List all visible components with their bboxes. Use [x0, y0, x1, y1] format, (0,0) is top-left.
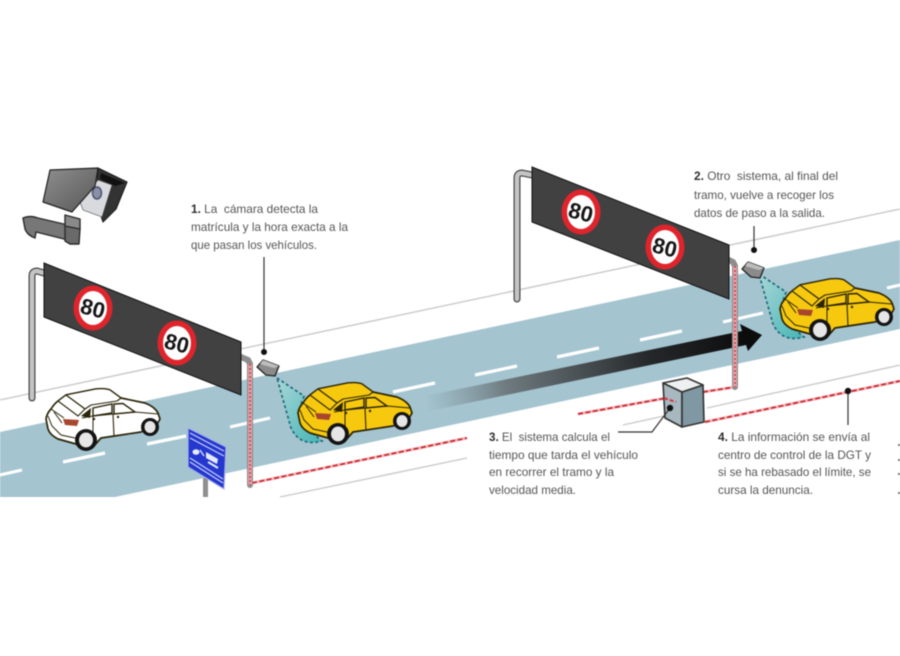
yellow car 2	[780, 279, 894, 341]
text: step 3: en recorrer el tramo y la	[489, 465, 614, 479]
text: step 2: 2. Otro sistema, al final del	[694, 169, 838, 183]
text: step 1: 1. La cámara detecta la	[191, 202, 318, 216]
camera bracket	[23, 215, 80, 244]
text: step 2: tramo, vuelve a recoger los	[694, 188, 834, 202]
road	[0, 240, 900, 497]
text: step 4: 4. La información se envía al	[718, 430, 870, 444]
arrow: vehicle travel along the section	[425, 324, 762, 412]
text: step 4	[718, 430, 871, 497]
leader line step 4	[845, 388, 851, 425]
second gantry left post	[517, 173, 532, 299]
text: step 1	[191, 202, 348, 252]
gantry sign 2 with speed limits	[532, 167, 729, 299]
left gantry post	[32, 271, 44, 398]
leader line step 1	[261, 257, 267, 355]
cropped marks at right edge	[898, 444, 900, 494]
speed limit 80 sign	[74, 286, 112, 330]
leader line step 2	[751, 226, 757, 253]
speed limit 80 sign	[158, 320, 196, 366]
equipment cabinet	[663, 378, 704, 427]
gantry sign 1 with speed limits	[44, 263, 241, 395]
text: step 1: que pasan los vehículos.	[191, 238, 317, 252]
text: step 4: centro de control de la DGT y	[718, 448, 871, 462]
small camera 2	[742, 262, 764, 278]
speed limit 80 sign: 80	[78, 293, 108, 324]
small camera 1	[257, 360, 279, 376]
text: step 4: si se ha rebasado el límite, se	[718, 465, 871, 479]
text: step 2	[694, 169, 838, 220]
centre lane dashes	[0, 285, 900, 475]
text: step 4: cursa la denuncia.	[718, 483, 813, 497]
speed limit 80 sign	[646, 224, 684, 270]
large surveillance camera icon	[23, 168, 127, 244]
text: step 3: 3. El sistema calcula el	[489, 430, 610, 444]
speed limit 80 sign: 80	[650, 232, 680, 263]
red cable: cabinet to control centre	[705, 381, 900, 422]
yellow car 1	[298, 383, 412, 445]
second gantry right post with pink cable	[729, 260, 735, 387]
text: step 3	[489, 430, 638, 497]
camera housing side	[96, 168, 127, 222]
text: step 3: tiempo que tarda el vehículo	[489, 448, 638, 462]
text: step 1: matrícula y la hora exacta a la	[191, 220, 348, 234]
camera detection cone 1	[277, 378, 322, 442]
camera detection cone 2	[759, 274, 804, 338]
lower road edge line	[280, 365, 900, 497]
speed limit 80 sign	[562, 190, 600, 234]
speed limit 80 sign: 80	[162, 328, 192, 359]
leader line step 3	[618, 405, 673, 432]
camera lens face	[80, 180, 112, 217]
text: step 3: velocidad media.	[489, 483, 576, 497]
white car	[46, 389, 160, 451]
upper road edge line	[0, 209, 900, 400]
text: step 2: datos de paso a la salida.	[694, 206, 825, 220]
first gantry right post with pink cable	[241, 357, 250, 485]
speed limit 80 sign: 80	[566, 197, 596, 228]
blue section radar sign	[188, 428, 226, 497]
camera hood	[43, 168, 98, 212]
red cable: first gantry to cabinet	[252, 387, 735, 483]
